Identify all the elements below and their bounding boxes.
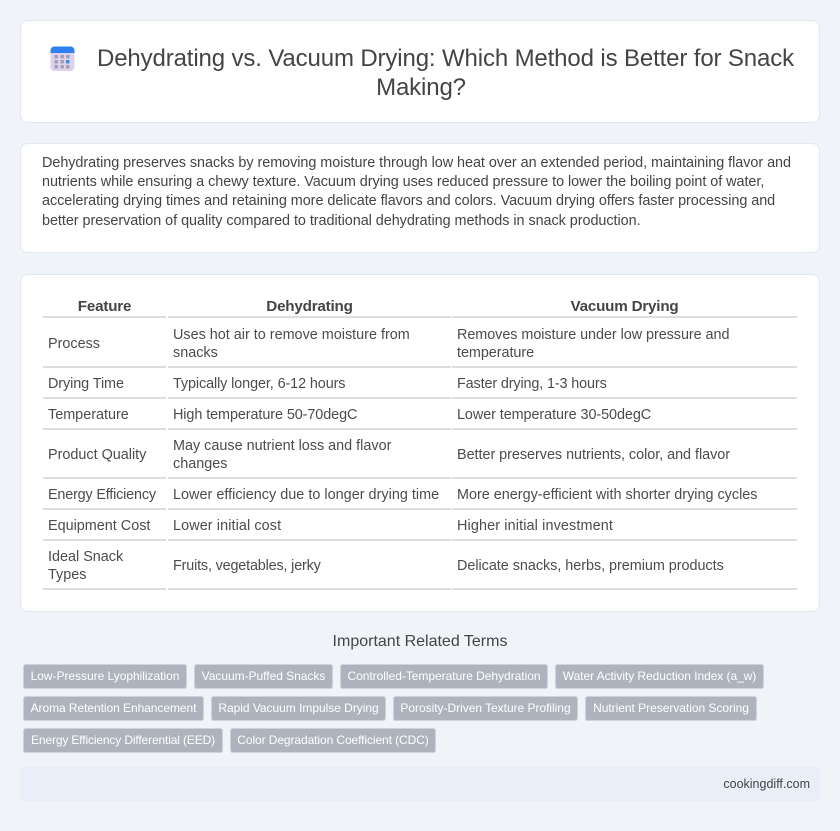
panel: comparison table: More energy-efficient with shorter drying cycles bbox=[457, 487, 757, 503]
panel: comparison table: High temperature 50-70degC bbox=[173, 407, 357, 423]
panel: comparison table: Delicate snacks, herbs, premium products bbox=[457, 558, 724, 574]
row: Temperature: Temperature bbox=[48, 407, 129, 423]
tag list: Vacuum-Puffed Snacks bbox=[202, 669, 325, 683]
tag list bbox=[23, 664, 764, 753]
row: Equipment Cost: Equipment Cost bbox=[48, 518, 150, 534]
panel: comparison table: Faster drying, 1-3 hours bbox=[457, 376, 607, 392]
panel: comparison table: Typically longer, 6-12 hours bbox=[173, 376, 345, 392]
row: Product Quality: Product Quality bbox=[48, 447, 146, 463]
tag list: Water Activity Reduction Index (a_w) bbox=[563, 669, 756, 683]
title panel bbox=[20, 20, 820, 123]
panel: comparison table: Better preserves nutrients, color, and flavor bbox=[457, 447, 730, 463]
row: Drying Time: Drying Time bbox=[48, 376, 124, 392]
heading: related terms: Important Related Terms bbox=[333, 633, 507, 650]
panel: comparison table: snacks bbox=[173, 345, 218, 361]
tag list: Low-Pressure Lyophilization bbox=[31, 669, 179, 683]
panel: introduction bbox=[20, 143, 820, 253]
footer bbox=[20, 767, 820, 801]
tag list: Aroma Retention Enhancement bbox=[31, 701, 196, 715]
panel: comparison table: Higher initial investment bbox=[457, 518, 613, 534]
row: Process: Process bbox=[48, 336, 100, 352]
tag list: Controlled-Temperature Dehydration bbox=[347, 669, 541, 683]
tag list: Nutrient Preservation Scoring bbox=[593, 701, 749, 715]
tag list: Rapid Vacuum Impulse Drying bbox=[218, 701, 379, 715]
panel: comparison table: Fruits, vegetables, jerky bbox=[173, 558, 321, 574]
row: Ideal Snack Types: Ideal Snack bbox=[48, 549, 123, 565]
panel: comparison table: May cause nutrient loss and flavor bbox=[173, 438, 391, 454]
text block: intro: accelerating drying times and retaining more delicate flavors and colors. Vacuum drying offers faster processing and bbox=[42, 193, 775, 209]
panel: comparison table bbox=[20, 274, 820, 612]
row: Energy Efficiency: Energy Efficiency bbox=[48, 487, 156, 503]
icon: calendar bbox=[50, 46, 74, 71]
row: Ideal Snack Types bbox=[48, 549, 124, 583]
panel: comparison table: Removes moisture under low pressure and bbox=[457, 327, 729, 343]
panel: comparison table: Lower efficiency due to longer drying time bbox=[173, 487, 439, 503]
table header: Dehydrating: Dehydrating bbox=[266, 298, 353, 315]
panel: comparison table: Lower temperature 30-50degC bbox=[457, 407, 651, 423]
tag list: Color Degradation Coefficient (CDC) bbox=[237, 733, 429, 747]
text block: intro: nutrients while ensuring a chewy texture. Vacuum drying uses reduced pressure to lower the boiling point of water, bbox=[42, 174, 764, 190]
table header: Vacuum Drying: Vacuum Drying bbox=[571, 298, 678, 315]
heading: Dehydrating vs. Vacuum Drying: Which Method is Better for Snack bbox=[97, 45, 794, 72]
panel: comparison table: Uses hot air to remove moisture from bbox=[173, 327, 410, 343]
heading: Making? bbox=[376, 74, 466, 101]
text block: intro bbox=[42, 155, 791, 229]
tag list: Porosity-Driven Texture Profiling bbox=[400, 701, 571, 715]
text block: intro: better preservation of quality compared to traditional dehydrating methods in snack production. bbox=[42, 213, 641, 229]
panel: comparison table: Lower initial cost bbox=[173, 518, 281, 534]
row: Ideal Snack Types: Types bbox=[48, 567, 86, 583]
heading bbox=[97, 45, 794, 101]
table header: Feature: Feature bbox=[78, 298, 131, 315]
tag list: Energy Efficiency Differential (EED) bbox=[31, 733, 215, 747]
panel: comparison table: changes bbox=[173, 456, 227, 472]
panel: comparison table: temperature bbox=[457, 345, 534, 361]
footer text: cookingdiff.com bbox=[723, 777, 810, 791]
text block: intro: Dehydrating preserves snacks by removing moisture through low heat over an extended period, maintaining flavor and bbox=[42, 155, 791, 171]
